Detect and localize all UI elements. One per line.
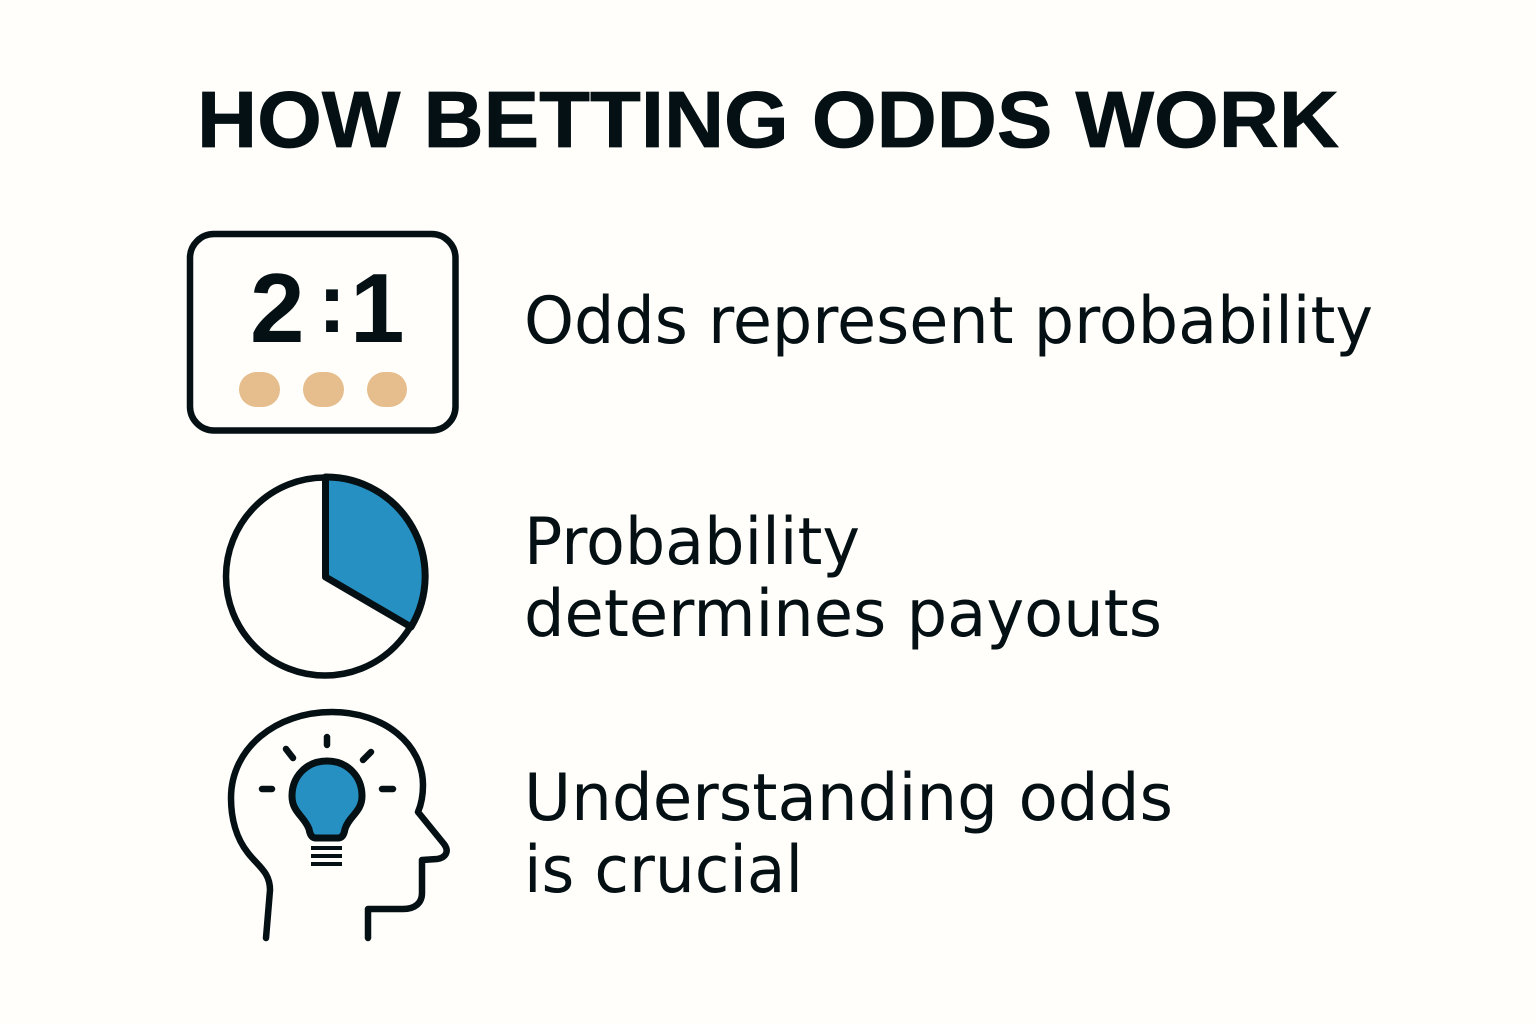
text: understanding odds is crucial: Understanding odds <box>524 761 1173 836</box>
icon: odds card <box>190 234 456 430</box>
icon: pie chart <box>226 477 425 676</box>
light rays <box>262 737 393 789</box>
text: odds represent probability: Odds represent probability <box>524 284 1373 359</box>
icon: head with lightbulb <box>231 712 447 938</box>
text: understanding odds is crucial: is crucial <box>524 833 803 908</box>
odds ratio: 2 <box>250 253 305 363</box>
lightbulb <box>292 761 362 838</box>
text: probability determines payouts: determines payouts <box>524 577 1162 652</box>
odds ratio: : <box>318 256 346 350</box>
token dots <box>239 372 407 407</box>
text: probability determines payouts: Probability <box>524 505 860 580</box>
title: HOW BETTING ODDS WORK <box>197 75 1339 164</box>
odds ratio: 1 <box>350 253 405 363</box>
bulb base <box>311 848 342 864</box>
head outline <box>231 712 447 938</box>
